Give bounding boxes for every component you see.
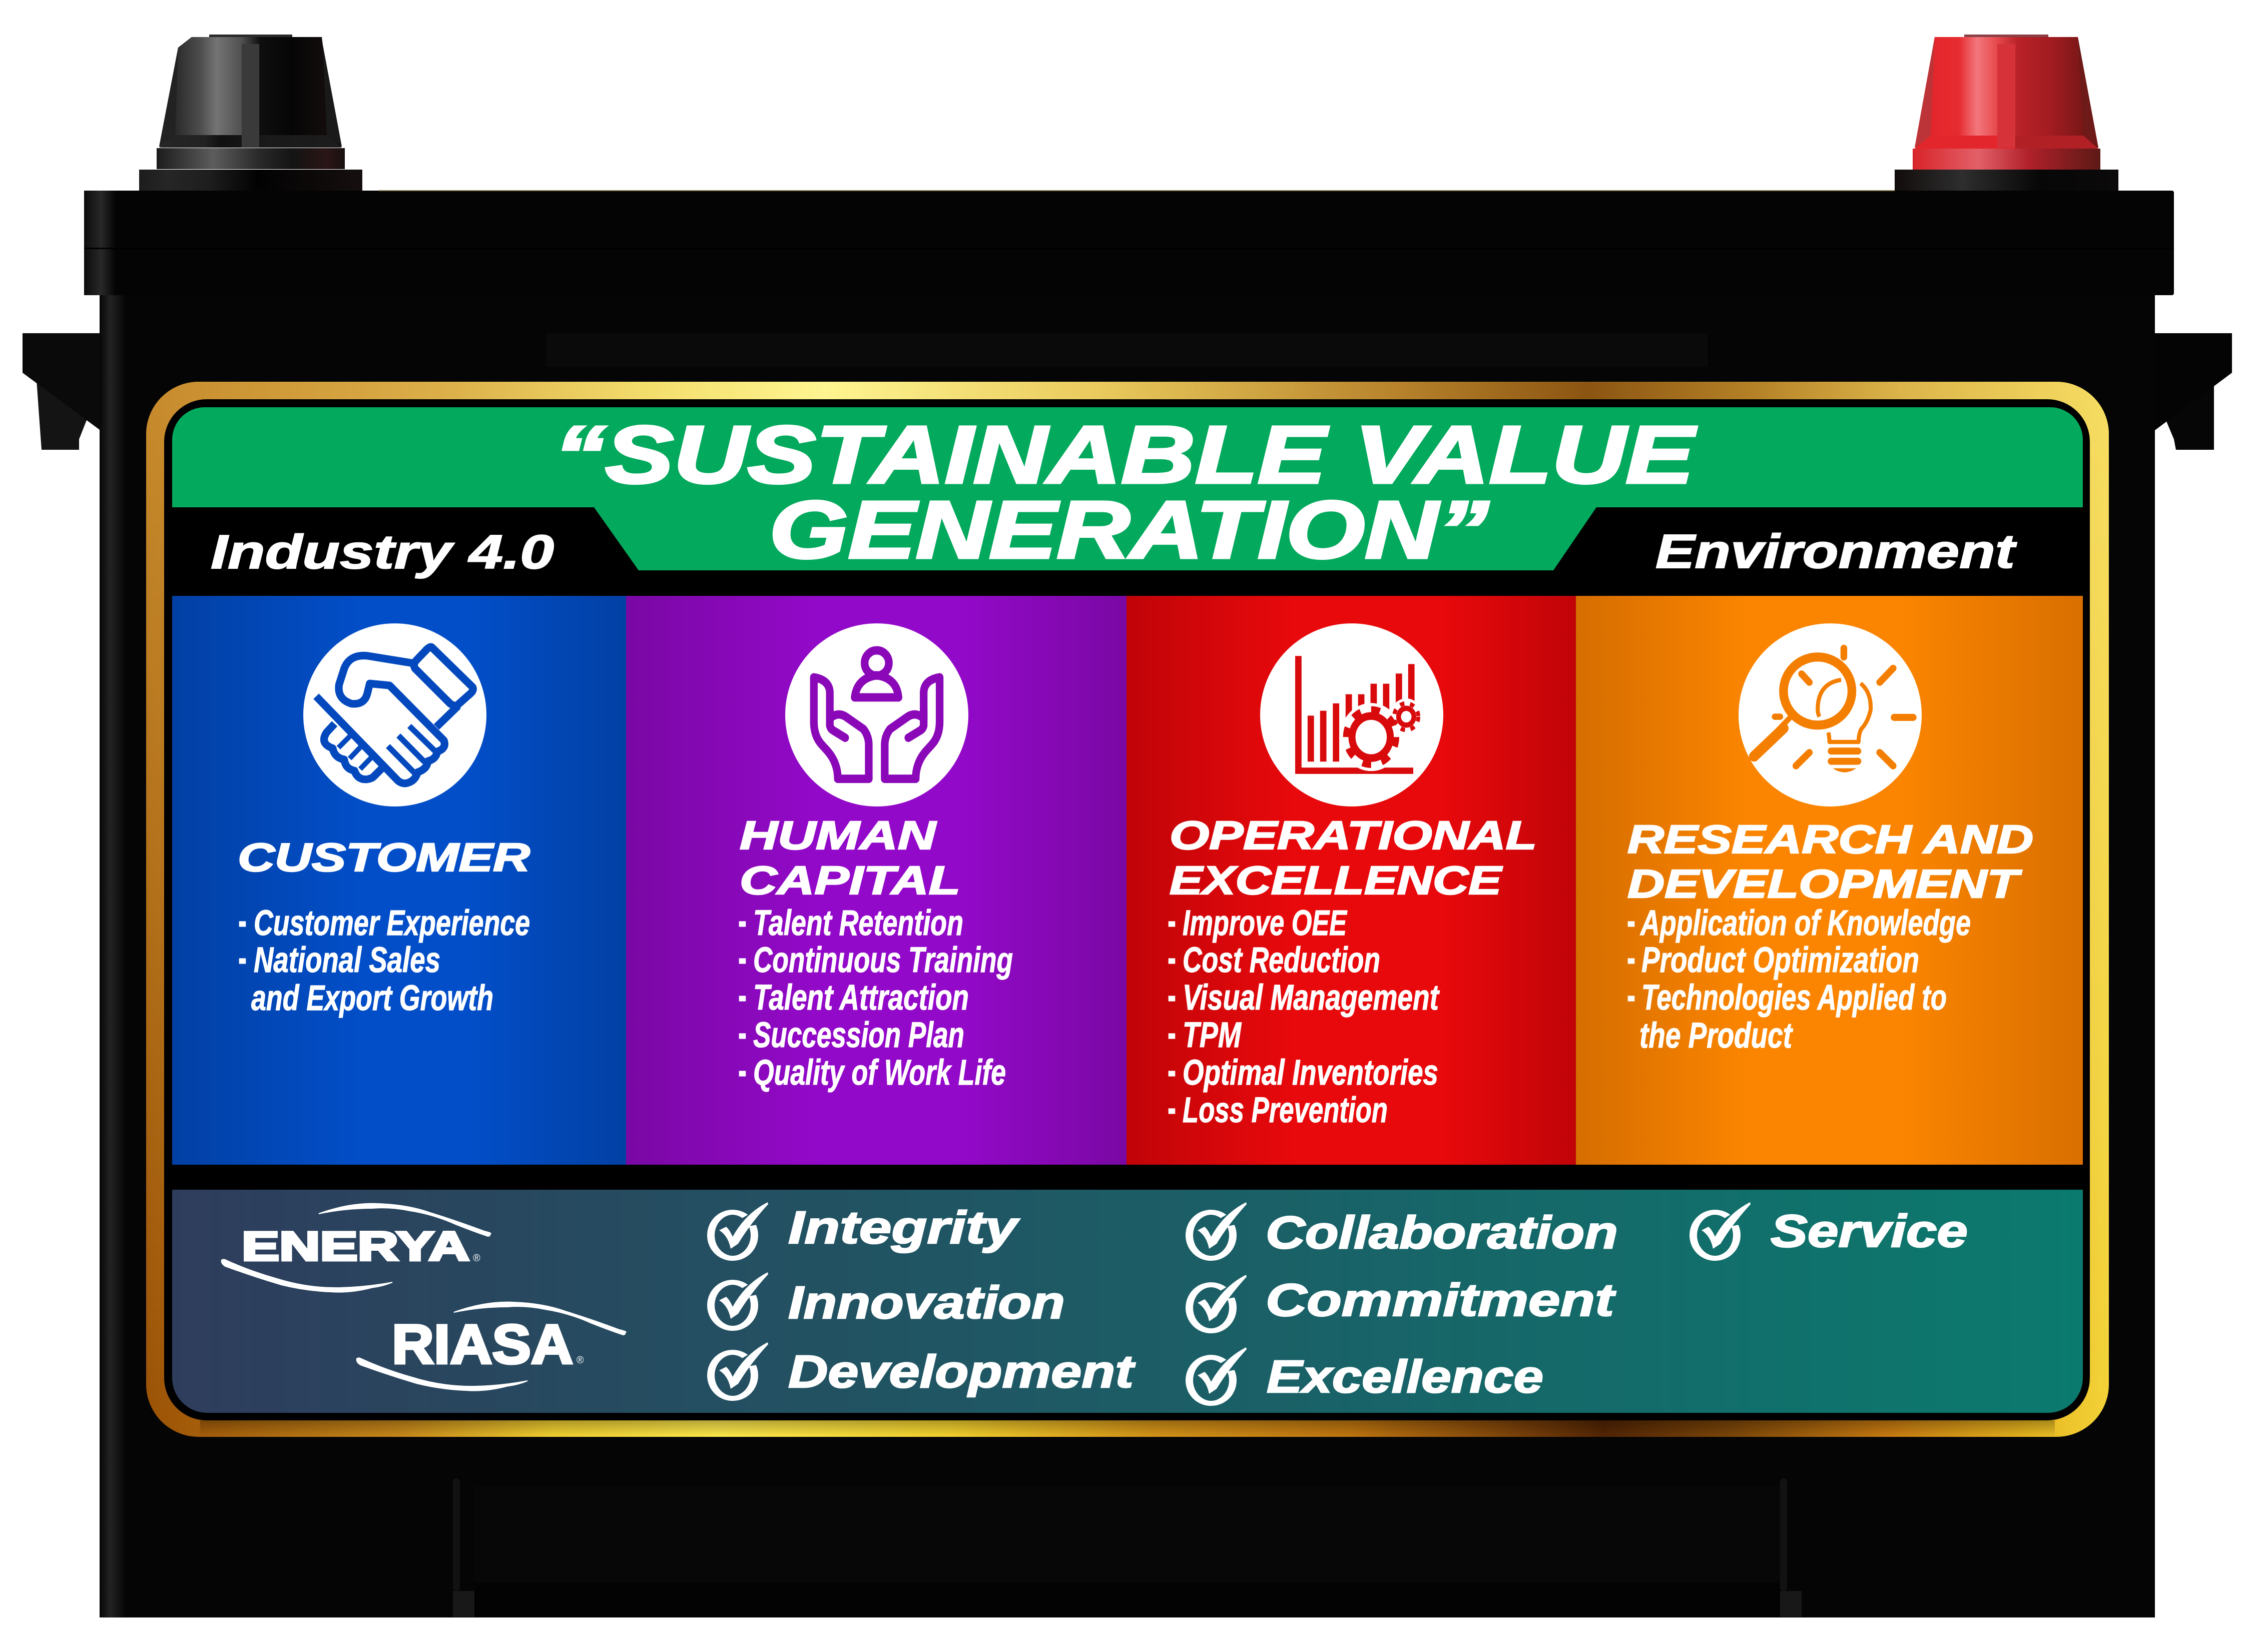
heading: research and development bbox=[1627, 817, 2033, 906]
bullet list: customer: Customer Experience bbox=[254, 904, 530, 943]
logo: Riasa bbox=[356, 1302, 627, 1391]
bullet list: operational excellence: Optimal Inventories bbox=[1183, 1053, 1438, 1093]
bullet list: operational excellence: TPM bbox=[1183, 1016, 1242, 1055]
heading: human capital: HUMAN bbox=[740, 813, 937, 858]
bullet list: operational excellence: Loss Prevention bbox=[1183, 1091, 1388, 1130]
heading: human capital: CAPITAL bbox=[740, 858, 960, 903]
logo: Riasa: RIASA bbox=[392, 1314, 573, 1375]
bullet list: human capital: - bbox=[738, 1009, 747, 1057]
value: Development: Development bbox=[788, 1346, 1136, 1397]
bullet list: customer: - bbox=[238, 897, 247, 945]
gold label frame bbox=[146, 382, 2109, 1437]
bullet list: research and development: Product Optimization bbox=[1641, 941, 1919, 980]
icon: bar chart with gears bbox=[1260, 623, 1443, 806]
bullet list: human capital: - bbox=[738, 934, 747, 982]
value: Excellence: Excellence bbox=[1267, 1351, 1543, 1402]
logo: Enerya: ENERYA bbox=[242, 1224, 469, 1269]
icon: handshake bbox=[303, 623, 486, 806]
bullet list: customer: - bbox=[238, 934, 247, 982]
bottom handle recess bbox=[453, 1478, 1802, 1617]
heading: operational excellence: OPERATIONAL bbox=[1170, 813, 1537, 858]
bullet list: human capital: - bbox=[738, 897, 747, 945]
bullet list: research and development: Technologies Applied to bbox=[1641, 978, 1947, 1018]
heading: research and development: RESEARCH AND bbox=[1627, 817, 2033, 862]
title bbox=[554, 409, 1697, 575]
panel: human capital bbox=[626, 596, 1126, 1165]
title: GENERATION” bbox=[769, 484, 1489, 575]
title banner bbox=[172, 407, 2083, 575]
bullet list: operational excellence: Improve OEE bbox=[1183, 904, 1348, 943]
value: Integrity: Integrity bbox=[788, 1202, 1020, 1253]
bullet list: operational excellence: - bbox=[1168, 1084, 1176, 1132]
value: Innovation: Innovation bbox=[788, 1277, 1065, 1328]
bullet list: human capital: Talent Attraction bbox=[753, 978, 969, 1018]
bullet list: operational excellence: Cost Reduction bbox=[1183, 941, 1380, 980]
value: Collaboration bbox=[1190, 1202, 1618, 1258]
icon: hands holding person bbox=[785, 623, 968, 806]
bullet list: operational excellence: - bbox=[1168, 934, 1176, 982]
right mounting tab bbox=[2155, 333, 2232, 450]
logo: Riasa: ® bbox=[577, 1355, 584, 1366]
bullet list: human capital: Continuous Training bbox=[753, 941, 1013, 980]
value: Commitment bbox=[1190, 1275, 1616, 1331]
label: Industry 4.0: Industry 4.0 bbox=[211, 525, 554, 579]
bullet list: human capital: Succession Plan bbox=[753, 1016, 964, 1055]
panel: research and development bbox=[1576, 596, 2083, 1165]
negative terminal (black) bbox=[139, 35, 362, 191]
battery body bbox=[100, 295, 2155, 1617]
bullet list: customer bbox=[238, 897, 530, 1018]
bullet list: research and development: - bbox=[1627, 897, 1635, 945]
heading: human capital bbox=[740, 813, 960, 903]
positive terminal (red) bbox=[1895, 35, 2118, 191]
bullet list: customer: National Sales bbox=[254, 941, 440, 980]
bullet list: human capital: - bbox=[738, 1047, 747, 1094]
bullet list: customer: and Export Growth bbox=[251, 979, 493, 1018]
value: Commitment: Commitment bbox=[1266, 1275, 1616, 1326]
bullet list: operational excellence: - bbox=[1168, 972, 1176, 1019]
title: “SUSTAINABLE VALUE bbox=[554, 409, 1697, 500]
bullet list: human capital: Quality of Work Life bbox=[753, 1053, 1006, 1093]
panel: customer bbox=[172, 596, 626, 1165]
bullet list: human capital: Talent Retention bbox=[753, 904, 963, 943]
value: Innovation bbox=[711, 1272, 1065, 1328]
bullet list: operational excellence: - bbox=[1168, 1047, 1176, 1094]
icon: magnifier and light bulb bbox=[1739, 623, 1922, 806]
bullet list: research and development: the Product bbox=[1639, 1016, 1794, 1056]
logo: Enerya bbox=[221, 1203, 491, 1293]
bullet list: research and development: - bbox=[1627, 972, 1635, 1019]
value: Service bbox=[1694, 1202, 1968, 1258]
value: Excellence bbox=[1190, 1347, 1543, 1403]
bullet list: research and development: Application of Knowledge bbox=[1639, 904, 1971, 943]
bullet list: operational excellence: - bbox=[1168, 897, 1176, 945]
battery lid bbox=[84, 190, 2174, 295]
heading: operational excellence: EXCELLENCE bbox=[1170, 858, 1503, 903]
heading: operational excellence bbox=[1170, 813, 1537, 903]
panel: operational excellence bbox=[1126, 596, 1576, 1165]
bullet list: human capital bbox=[738, 897, 1013, 1094]
left mounting tab bbox=[23, 333, 100, 450]
bullet list: research and development bbox=[1627, 897, 1971, 1056]
heading: customer: CUSTOMER bbox=[238, 835, 530, 880]
value: Integrity bbox=[711, 1202, 1020, 1258]
bullet list: operational excellence: Visual Management bbox=[1183, 978, 1440, 1018]
bullet list: operational excellence: - bbox=[1168, 1009, 1176, 1057]
bullet list: operational excellence bbox=[1168, 897, 1440, 1132]
value: Service: Service bbox=[1771, 1206, 1968, 1257]
value: Development bbox=[711, 1342, 1136, 1398]
heading: research and development: DEVELOPMENT bbox=[1627, 862, 2022, 906]
logo: Enerya: ® bbox=[473, 1253, 480, 1264]
bullet list: human capital: - bbox=[738, 972, 747, 1019]
value: Collaboration: Collaboration bbox=[1266, 1207, 1618, 1258]
panel: company values bbox=[172, 1190, 2083, 1413]
bullet list: research and development: - bbox=[1627, 934, 1635, 982]
label: Environment: Environment bbox=[1655, 525, 2017, 578]
